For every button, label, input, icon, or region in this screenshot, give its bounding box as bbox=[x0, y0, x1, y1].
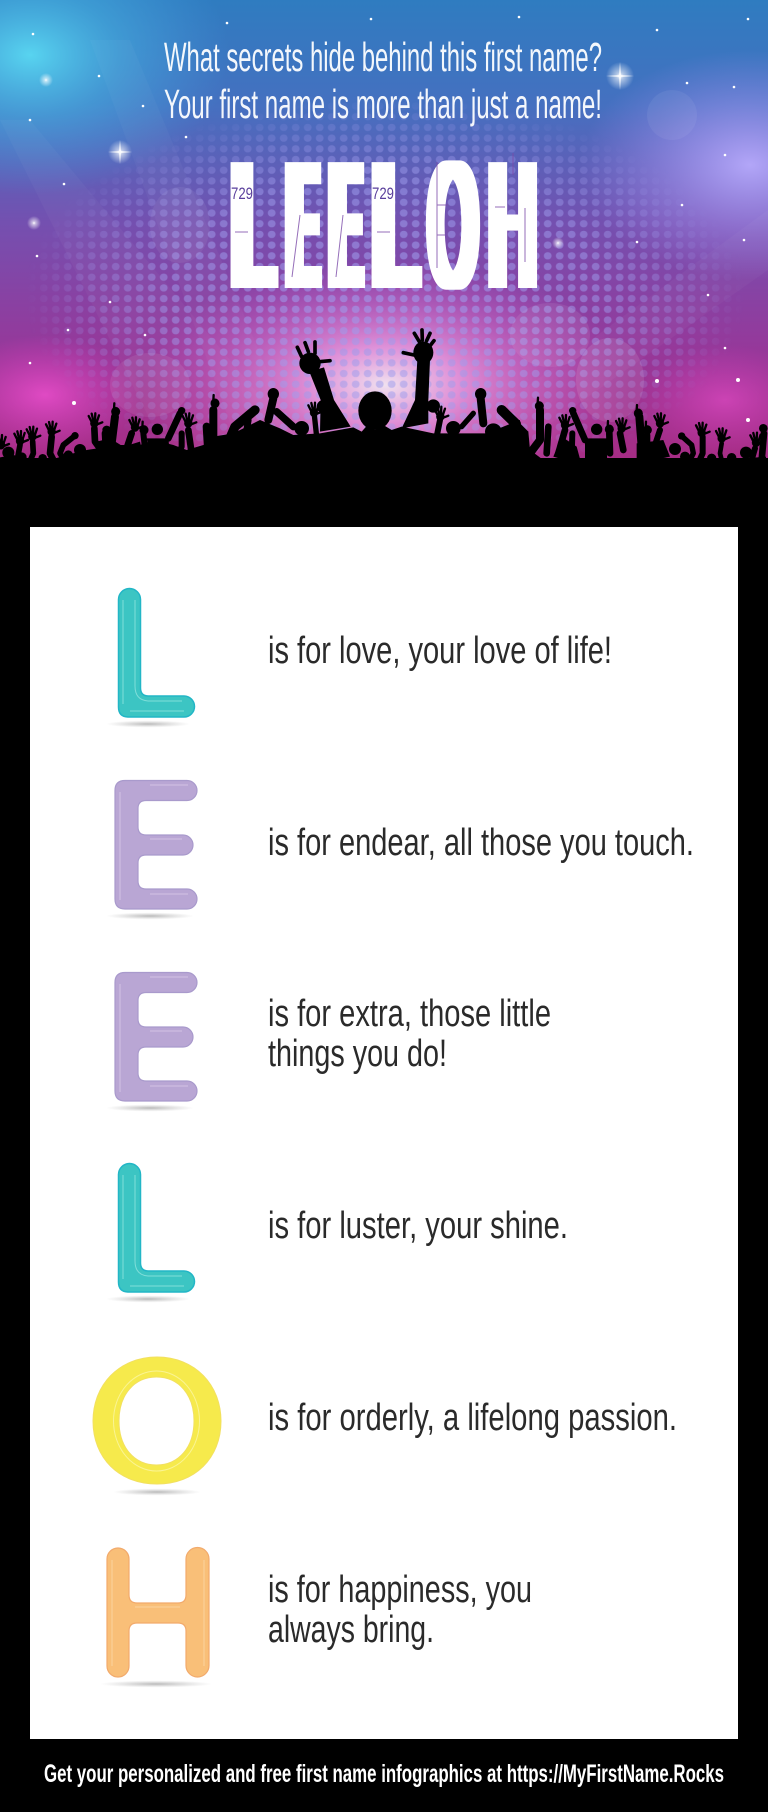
letter L bbox=[106, 1164, 194, 1302]
title: first name bbox=[231, 125, 536, 326]
text: L meaning: is for love, your love of life! bbox=[268, 630, 612, 672]
title: first name: E bbox=[331, 125, 360, 326]
text: H meaning: always bring. bbox=[268, 1609, 434, 1651]
heading: tagline bbox=[164, 34, 602, 127]
title: first name: L bbox=[373, 125, 418, 326]
text: E meaning: things you do! bbox=[268, 1033, 447, 1075]
text: L meaning: is for luster, your shine. bbox=[268, 1205, 568, 1247]
letter O bbox=[93, 1357, 221, 1496]
title: first name: L bbox=[232, 125, 274, 326]
panel: stage header background bbox=[0, 0, 768, 458]
icon: sparkles bbox=[27, 16, 750, 422]
text: E meaning: is for extra, those little bbox=[268, 993, 551, 1035]
letter H bbox=[100, 1548, 212, 1688]
text: E meaning bbox=[268, 993, 551, 1075]
title: first name: O bbox=[430, 125, 476, 326]
letter E bbox=[106, 780, 197, 920]
title: first name: 729 bbox=[372, 184, 394, 203]
text: H meaning bbox=[268, 1569, 532, 1651]
text: H meaning: is for happiness, you bbox=[268, 1569, 532, 1611]
text: H bbox=[489, 125, 536, 326]
illustration: crowd silhouette bbox=[0, 330, 768, 530]
panel: letter meanings bbox=[30, 527, 738, 1739]
letter L bbox=[106, 588, 194, 728]
title: first name: E bbox=[288, 125, 317, 326]
letter E bbox=[106, 972, 197, 1112]
title: first name: 729 bbox=[231, 184, 253, 203]
